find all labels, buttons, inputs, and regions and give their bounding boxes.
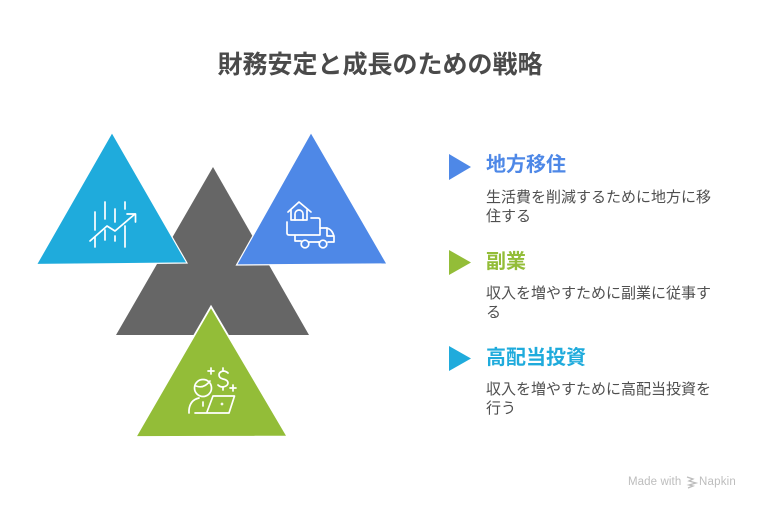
arrow marker: side job: [449, 250, 471, 275]
text: relocation description: 生活費を削減するために地方に移: [486, 189, 711, 206]
triangle: cyan high dividend investing: [36, 132, 187, 264]
heading: side job: 副業: [486, 251, 526, 273]
heading: relocation: 地方移住: [486, 154, 566, 176]
icon: growth chart: [90, 202, 136, 247]
text: relocation description: 住する: [486, 208, 531, 224]
text: side job description: 収入を増やすために副業に従事す: [486, 285, 711, 302]
watermark: made with: Made with: [628, 476, 681, 488]
arrow marker: relocation: [449, 154, 471, 180]
triangle: central gray: [116, 167, 309, 335]
triangle: blue relocation: [236, 132, 387, 265]
text: investing description: [486, 381, 711, 416]
text: investing description: 行う: [486, 400, 516, 416]
triangle: green side job: [136, 306, 288, 437]
text: relocation description: [486, 189, 711, 224]
icon: person with laptop and dollar: [189, 368, 236, 413]
icon: house on truck: [287, 202, 334, 248]
text: investing description: 収入を増やすために高配当投資を: [486, 381, 711, 398]
text: side job description: る: [486, 304, 501, 320]
watermark logo mark: [687, 477, 696, 488]
title: 財務安定と成長のための戦略: [217, 51, 542, 79]
text: side job description: [486, 285, 711, 320]
heading: high dividend investing: 高配当投資: [486, 347, 586, 369]
arrow marker: investing: [449, 346, 471, 371]
watermark: napkin: Napkin: [699, 476, 736, 488]
